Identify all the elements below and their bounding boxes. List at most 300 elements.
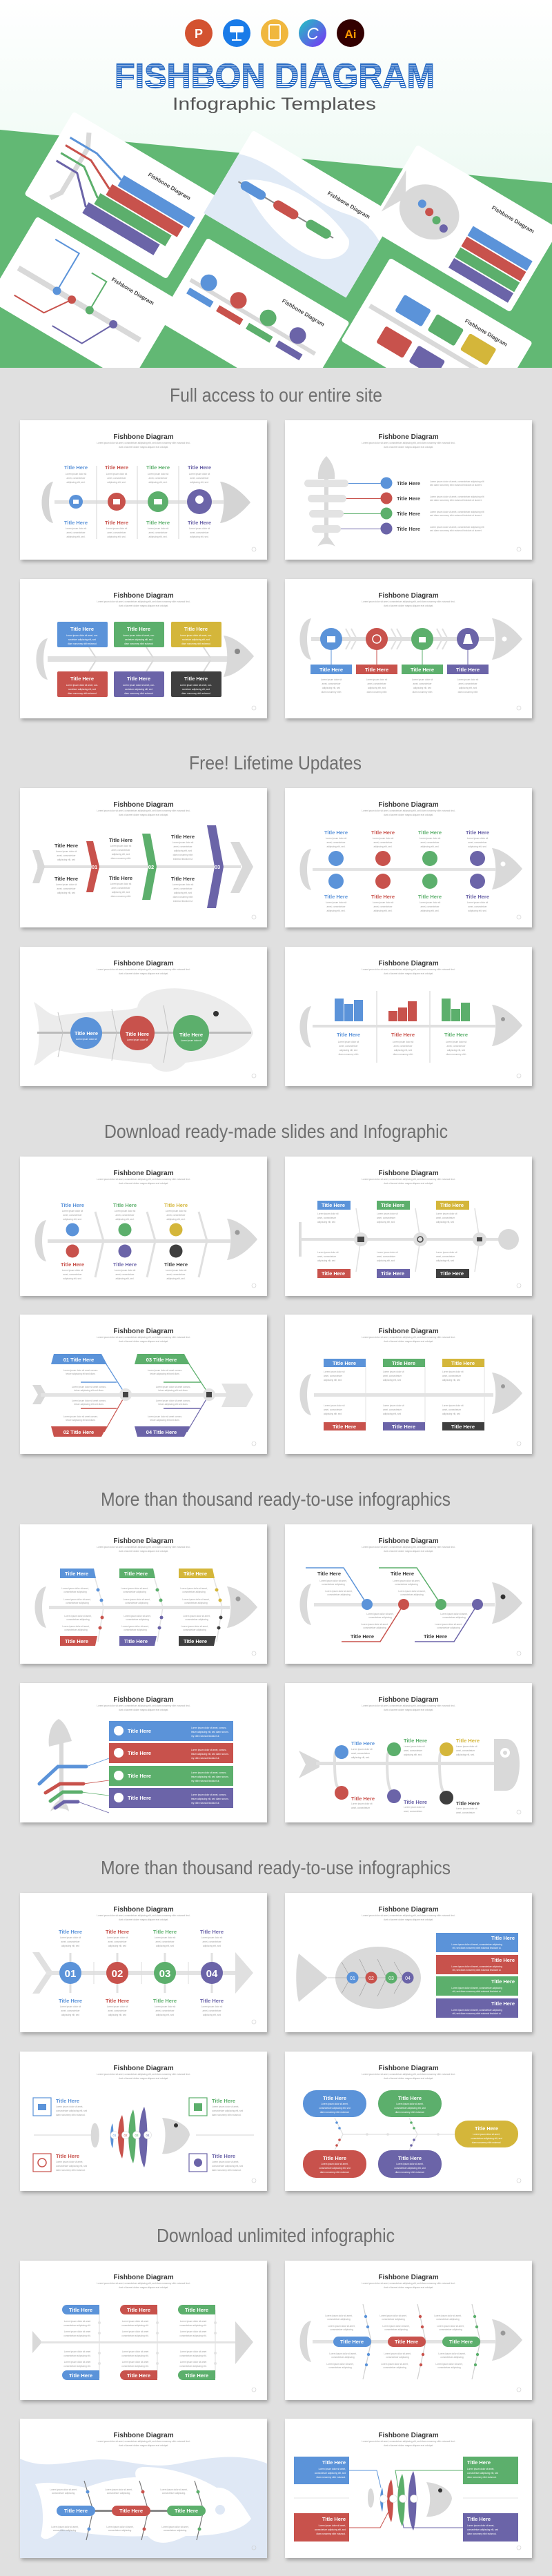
slide 11: tetuer adipiscing elit sed diam. [75,1403,104,1406]
slide 13: consectetuer adipiscing [126,1618,149,1621]
slide 6: Lorem ipsum dolor sit [467,901,488,904]
slide 8: amet, consectetuer [339,1045,358,1048]
slide 21: Lorem ipsum dolor sit amet [64,2350,90,2353]
slide 2: Lorem ipsum dolor sit amet, consectetuer adipiscing elit [430,495,484,498]
slide 19 [20,2052,267,2191]
slide 6 [285,788,532,927]
rotated slide A: Fishbone Diagram [147,171,192,201]
slide 8: Title Here [391,1032,415,1038]
slide 6: Lorem ipsum dolor sit [373,901,393,904]
app icons: Ai [345,28,356,41]
slide 17: adipiscing elit, sed [203,2014,221,2016]
slide 16: Title Here [351,1796,375,1802]
slide 4: amet, consectetuer [322,682,341,685]
slide 1: adipiscing elit, sed. [149,481,168,484]
slide 9: Title Here [113,1202,137,1208]
slide 24: consectetuer adipiscing elit, sed [315,2528,346,2531]
slide 16: adipiscing elit, sed. [456,1753,475,1756]
slide 6: Lorem ipsum dolor sit [326,837,346,840]
slide 17: amet, consectetuer [108,1940,127,1943]
slide 12: Lorem ipsum dolor sit amet, consectetuer adipiscing elit, sed diam nonummy nibh euismod tinci- [362,1336,455,1339]
slide 12: adipiscing elit, sed [324,1379,342,1382]
slide 15: Lorem ipsum dolor sit amet, consectetuer adipiscing elit, sed diam nonummy nibh euismod tinci- [97,1704,190,1707]
slide 21: Lorem ipsum dolor sit amet [64,2361,90,2363]
slide 17: dunt ut laoreet dolore magna aliquam erat volutpat. [119,1918,168,1921]
slide 4 [285,579,532,718]
slide 10: adipiscing elit, sed [436,1221,454,1223]
slide 19: Title Here [56,2098,79,2104]
slide 14: consectetuer adipiscing [442,1616,466,1619]
slide 9: Lorem ipsum dolor sit [62,1210,83,1212]
slide 23: Lorem ipsum dolor sit amet, [160,2488,188,2491]
slide 2: Lorem ipsum dolor sit amet, consectetuer adipiscing elit, sed diam nonummy nibh euismod tinci- [362,442,455,444]
slide 5: Title Here [171,876,195,882]
slide 5: Lorem ipsum dolor sit [172,841,193,844]
slide 12: Lorem ipsum dolor sit [383,1370,404,1373]
slide 14: Lorem ipsum dolor sit amet, consectetuer adipiscing elit, sed diam nonummy nibh euismod tinci- [362,1546,455,1548]
slide 21: consectetuer adipiscing elit. [121,2324,149,2327]
slide 14: Lorem ipsum dolor sit amet, [366,1613,394,1615]
slide 1: adipiscing elit, sed. [149,535,168,538]
slide 5: Title Here [109,837,132,843]
slide 24: Title Here [322,2459,346,2466]
rotated slide D: Fishbone Diagram [110,276,155,306]
slide 24: Title Here [322,2516,346,2522]
slide 19: consectetuer adipiscing elit, sed [212,2165,243,2167]
slide 13: Title Here [184,1638,207,1644]
slide 6: adipiscing elit, sed. [374,910,393,912]
slide 19: diam nonummy nibh euismod. [212,2114,241,2116]
slide 3: diam nonummy nibh euismod [68,692,97,695]
slide 5: Title Here [171,834,195,840]
slide 18: Lorem ipsum dolor sit amet, consectetuer adipiscing [451,1965,502,1968]
slide 8: diam nonummy nibh [339,1053,359,1056]
slide 13: consectetuer adipiscing [125,1602,148,1604]
slide 18: Title Here [491,1957,515,1963]
slide 1: Title Here [64,464,88,471]
slide 17: Title Here [59,1929,82,1935]
slide 9: adipiscing elit, sed. [167,1218,186,1221]
slide 2: Title Here [397,495,420,502]
slide 24: consectetuer adipiscing elit, sed [315,2472,346,2475]
slide 17: adipiscing elit, sed [108,1945,126,1947]
slide 23: Title Here [175,2508,198,2514]
slide 19: dunt ut laoreet dolore magna aliquam erat volutpat. [119,2077,168,2080]
slide 1: Lorem ipsum dolor sit [106,473,127,475]
slide 17: Lorem ipsum dolor sit [60,1936,81,1939]
slide 9: amet, consectetuer [63,1214,82,1217]
slide 22: Lorem ipsum dolor sit amet, [438,2352,466,2355]
slide 6: adipiscing elit, sed. [327,910,346,912]
slide 15: Title Here [128,1795,151,1801]
slide 1: amet, consectetuer [148,477,168,480]
slide 12: Title Here [392,1424,415,1430]
slide 22: Lorem ipsum dolor sit amet, [384,2352,411,2355]
slide 1: amet, consectetuer [190,477,209,480]
slide 15: tetuer adipiscing elit, sed diam nonum- [191,1731,229,1733]
slide 5: Title Here [109,875,132,881]
slide 1: Title Here [105,520,128,526]
slide 9: amet, consectetuer [166,1273,186,1276]
slide 17: Lorem ipsum dolor sit amet, consectetuer adipiscing elit, sed diam nonummy nibh euismod tinci- [97,1914,190,1917]
app icons: P [195,27,203,41]
slide 24: Fishbone Diagram [378,2432,439,2439]
slide 22: Lorem ipsum dolor sit amet, [326,2363,354,2366]
slide 13: consectetuer adipiscing [63,1591,87,1593]
slide 4: amet, consectetuer [367,682,386,685]
slide 19: consectetuer adipiscing elit, sed [212,2110,243,2112]
slide 3: Lorem ipsum dolor sit amet, con- [123,684,155,687]
slide 3: sectetuer adipiscing elit, sed [68,638,96,641]
slide 21: consectetuer adipiscing elit. [121,2365,149,2368]
slide 11: Lorem ipsum dolor sit amet consec- [72,1399,106,1402]
slide 5: dunt ut laoreet dolore magna aliquam erat volutpat. [119,814,168,816]
slide 12: amet, consectetuer [383,1408,402,1411]
slide 9: adipiscing elit, sed. [116,1218,135,1221]
slide 3: sectetuer adipiscing elit, sed [182,638,210,641]
slide 8 [285,947,532,1086]
slide 16: adipiscing elit, sed. [404,1753,422,1756]
slide 12: amet, consectetuer [324,1375,343,1377]
slide 16: amet, consectetuer [404,1749,423,1752]
slide 2: Lorem ipsum dolor sit amet, consectetuer adipiscing elit [430,511,484,513]
slide 15: Title Here [128,1773,151,1779]
slide 24: diam nonummy nibh euismod. [316,2476,346,2479]
slide 16: Title Here [456,1738,480,1744]
slide 8: Lorem ipsum dolor sit [446,1041,466,1043]
slide 14: Lorem ipsum dolor sit amet, [325,1590,353,1593]
rotated slide E: Fishbone Diagram [281,297,326,328]
slide 3: sectetuer adipiscing elit, sed [125,688,152,691]
slide 13: Title Here [184,1571,207,1577]
slide 16: Lorem ipsum dolor sit [404,1806,425,1809]
slide 17: Title Here [200,1929,224,1935]
slide 2: Fishbone Diagram [378,433,439,441]
slide 20: Lorem ipsum dolor sit amet, [473,2133,500,2136]
slide 3: diam nonummy nibh euismod [124,642,153,645]
slide 1: amet, consectetuer [107,477,126,480]
slide 22: Lorem ipsum dolor sit amet, [435,2363,463,2366]
slide 3: Title Here [184,676,208,682]
slide 5: diam nonummy nibh [111,895,131,898]
slide 14: Title Here [424,1633,447,1640]
slide 8: amet, consectetuer [393,1045,413,1048]
slide 10: Lorem ipsum dolor sit [377,1212,398,1215]
slide 10: amet, consectetuer [317,1255,337,1258]
heading: full access: Full access to our entire site [170,384,382,406]
slide 21: Lorem ipsum dolor sit amet [180,2350,206,2353]
slide 21: Lorem ipsum dolor sit amet [122,2350,148,2353]
slide 6: adipiscing elit, sed. [374,845,393,848]
slide 8: dunt ut laoreet dolore magna aliquam erat volutpat. [384,972,433,975]
slide 4: amet, consectetuer [458,682,477,685]
slide 13: Lorem ipsum dolor sit amet, [61,1587,89,1590]
heading: download unlimited: Download unlimited infographic [157,2225,395,2246]
slide 10: amet, consectetuer [436,1217,455,1219]
slide 22: consectetuer adipiscing [439,2328,462,2331]
slide 9: Lorem ipsum dolor sit [115,1269,135,1272]
slide 19: diam nonummy nibh euismod. [56,2169,86,2172]
slide 1: Lorem ipsum dolor sit [148,527,168,530]
slide 10: Title Here [440,1270,464,1277]
header banner [0,0,552,368]
slide 3: Lorem ipsum dolor sit amet, con- [180,634,212,637]
slide 1: adipiscing elit, sed. [67,535,86,538]
slide 11: dunt ut laoreet dolore magna aliquam erat volutpat. [119,1340,168,1343]
slide 5: diam nonummy nibh [111,857,131,860]
slide 18: dunt ut laoreet dolore magna aliquam erat volutpat. [384,1918,433,1921]
slide 13: Lorem ipsum dolor sit amet, [121,1625,149,1628]
slide 19: diam nonummy nibh euismod. [56,2114,86,2116]
slide 16: Lorem ipsum dolor sit [456,1745,477,1748]
slide 4: Title Here [411,667,434,673]
slide 13: Lorem ipsum dolor sit amet, [123,1598,150,1601]
slide 13: consectetuer adipiscing [124,1629,147,1631]
slide 23: consectetuer adipiscing. [164,2529,187,2532]
slide 23: Lorem ipsum dolor sit amet, [50,2488,77,2491]
slide 22: consectetuer adipiscing [328,2366,352,2369]
slide 22: Title Here [340,2339,364,2345]
slide 17: adipiscing elit, sed [61,2014,79,2016]
slide 10: Title Here [381,1270,404,1277]
slide 1: dunt ut laoreet dolore magna aliquam erat volutpat. [119,446,168,449]
slide 13: Title Here [124,1571,148,1577]
slide 22: consectetuer adipiscing [384,2328,408,2331]
slide 11: 01 Title Here [63,1357,94,1363]
slide 7: Lorem ipsum dolor sit amet, consectetuer adipiscing elit, sed diam nonummy nibh euismod tinci- [97,968,190,971]
slide 19: 04 [146,2134,150,2137]
slide 6: amet, consectetuer [468,905,487,908]
app icons [185,19,364,47]
slide 8: amet, consectetuer [446,1045,466,1048]
slide 7: dunt ut laoreet dolore magna aliquam erat volutpat. [119,972,168,975]
slide 9: amet, consectetuer [166,1214,186,1217]
slide 21 [20,2261,267,2400]
slide 21: Lorem ipsum dolor sit amet [122,2361,148,2363]
slide 23: Title Here [119,2508,143,2514]
slide 24: Lorem ipsum dolor sit amet, [467,2524,494,2527]
slide 5: adipiscing elit, sed [57,892,75,894]
slide 11: Lorem ipsum dolor sit amet consec- [72,1386,106,1388]
slide 10: Lorem ipsum dolor sit amet, consectetuer adipiscing elit, sed diam nonummy nibh euismod tinci- [362,1178,455,1181]
slide 7: Lorem ipsum dolor sit [127,1039,148,1041]
slide 14: Lorem ipsum dolor sit amet, [361,1623,388,1626]
heading: lifetime updates: Free! Lifetime Updates [189,752,362,774]
slide 9: Fishbone Diagram [113,1170,174,1177]
slide 17: adipiscing elit, sed [203,1945,221,1947]
slide 19: Lorem ipsum dolor sit amet, [56,2105,83,2108]
slide 17: Lorem ipsum dolor sit [201,2005,222,2008]
slide 3: diam nonummy nibh euismod [181,642,210,645]
slide 22: consectetuer adipiscing [436,2318,460,2321]
slide 23: Lorem ipsum dolor sit amet, consectetuer adipiscing elit, sed diam nonummy nibh euismod tinci- [97,2440,190,2443]
slide 5: adipiscing elit, sed [57,858,75,861]
slide 22: Lorem ipsum dolor sit amet, [329,2352,357,2355]
slide 5: diam nonummy nibh [173,854,193,856]
slide 17: amet, consectetuer [202,2009,221,2012]
slide 12: Title Here [333,1424,356,1430]
slide 21: consectetuer adipiscing elit. [179,2354,207,2357]
rotated slide B: Fishbone Diagram [326,190,371,220]
slide 18: 02 [368,1976,374,1981]
slide 23: dunt ut laoreet dolore magna aliquam erat volutpat. [119,2444,168,2447]
slide 13: consectetuer adipiscing [184,1602,208,1604]
heading: download ready-made: Download ready-made slides and Infographic [104,1121,448,1142]
slide 19: 01 [112,2134,117,2137]
slide 5: amet, consectetuer [57,887,76,890]
slide 15: Title Here [128,1750,151,1756]
slide 4: Lorem ipsum dolor sit [457,678,478,681]
slide 16: Title Here [404,1799,427,1805]
slide 9: adipiscing elit, sed. [63,1218,82,1221]
slide 6: amet, consectetuer [420,905,440,908]
slide 6: Title Here [418,894,442,900]
slide 10: adipiscing elit, sed [317,1221,335,1223]
slide 6: adipiscing elit, sed. [421,845,440,848]
slide 11: 03 Title Here [146,1357,177,1363]
slide 2: sed diam nonummy nibh euismod tincidunt ut laoreet. [430,514,482,517]
slide 18: Title Here [491,1978,515,1985]
slide 21: consectetuer adipiscing elit. [63,2365,91,2368]
slide 24: Title Here [467,2459,491,2466]
slide 1: amet, consectetuer [66,531,86,534]
slide 16: Lorem ipsum dolor sit [456,1807,477,1810]
slide 1: Lorem ipsum dolor sit amet, consectetuer adipiscing elit, sed diam nonummy nibh euismod tinci- [97,442,190,444]
slide 11: tetuer adipiscing elit sed diam. [159,1403,188,1406]
slide 22: consectetuer adipiscing [331,2356,355,2359]
slide 19: Title Here [212,2153,235,2159]
slide 9: Lorem ipsum dolor sit [166,1210,186,1212]
slide 15: tetuer adipiscing elit, sed diam nonum- [191,1798,229,1800]
slide 18: elit, sed diam nonummy nibh euismod tincidunt ut. [453,1990,501,1993]
slide 10: Title Here [381,1202,404,1208]
slide 6: amet, consectetuer [373,905,393,908]
slide 11: tetuer adipiscing elit sed diam. [75,1389,104,1392]
slide 23: consectetuer adipiscing. [162,2492,186,2495]
slide 3: dunt ut laoreet dolore magna aliquam erat volutpat. [119,604,168,607]
slide 2: sed diam nonummy nibh euismod tincidunt ut laoreet. [430,529,482,532]
slide 1 [20,420,267,560]
slide 1: Lorem ipsum dolor sit [189,527,210,530]
slide 22 [285,2261,532,2400]
slide 13: Fishbone Diagram [113,1537,174,1545]
slide 6: Fishbone Diagram [378,801,439,809]
slide 14: Lorem ipsum dolor sit amet, [319,1580,347,1582]
slide 17: adipiscing elit, sed [61,1945,79,1947]
slide 4: adipiscing elit, sed [459,687,477,689]
slide 3 [20,579,267,718]
slide 11: Lorem ipsum dolor sit amet consec- [148,1415,182,1418]
slide 24: dunt ut laoreet dolore magna aliquam erat volutpat. [384,2444,433,2447]
slide 11: Fishbone Diagram [113,1328,174,1335]
slide 19: Title Here [212,2098,235,2104]
slide 24: consectetuer adipiscing elit, sed [467,2528,498,2531]
slide 13: consectetuer adipiscing [183,1629,206,1631]
slide 5: adipiscing elit, sed [174,849,192,852]
slide 16: amet, consectetuer [456,1749,475,1752]
app icons: C [306,25,319,43]
slide 9: Title Here [164,1261,188,1268]
slide 22: Lorem ipsum dolor sit amet, [437,2325,464,2328]
slide 10 [285,1157,532,1296]
slide 2: Lorem ipsum dolor sit amet, consectetuer adipiscing elit [430,480,484,483]
slide 17: Lorem ipsum dolor sit [107,1936,128,1939]
slide 23: Lorem ipsum dolor sit amet, [105,2488,132,2491]
slide 4: diam nonummy nibh [458,691,478,694]
slide 1: Title Here [64,520,88,526]
slide 3: Lorem ipsum dolor sit amet, con- [123,634,155,637]
slide 6: amet, consectetuer [326,905,346,908]
slide 13: Lorem ipsum dolor sit amet, [63,1598,91,1601]
slide 1: Title Here [146,520,170,526]
slide 6: Title Here [324,894,348,900]
slide 19: 03 [135,2134,139,2137]
slide 20: consectetuer adipiscing elit, sed [394,2167,426,2170]
slide 14: Title Here [391,1571,414,1577]
slide 13: consectetuer adipiscing [123,1591,146,1593]
slide 12 [285,1315,532,1454]
slide 1: amet, consectetuer [148,531,168,534]
slide 4: Lorem ipsum dolor sit [366,678,387,681]
slide 17: amet, consectetuer [61,2009,80,2012]
slide 6: Lorem ipsum dolor sit [326,901,346,904]
slide 3: Title Here [184,626,208,632]
slide 12: adipiscing elit, sed [442,1379,460,1382]
slide 11: tetuer adipiscing elit sed diam. [66,1373,96,1375]
slide 17: Lorem ipsum dolor sit [60,2005,81,2008]
slide 21: Title Here [69,2307,92,2313]
slide 5 [20,788,267,927]
slide 8: adipiscing elit, sed [447,1049,465,1052]
slide 20: diam nonummy nibh euismod. [320,2171,349,2174]
slide 20: diam nonummy nibh euismod. [320,2111,349,2114]
slide 15: Lorem ipsum dolor sit amet, consec- [191,1749,226,1751]
slide 9: adipiscing elit, sed. [116,1277,135,1280]
slide 20: Lorem ipsum dolor sit amet, [396,2103,424,2105]
slide 6: amet, consectetuer [420,841,440,844]
slide 2: sed diam nonummy nibh euismod tincidunt ut laoreet. [430,484,482,486]
slide 17: amet, consectetuer [202,1940,221,1943]
slide 23: consectetuer adipiscing. [52,2492,75,2495]
slide 12: Title Here [392,1360,415,1366]
slide 21: Fishbone Diagram [113,2274,174,2281]
slide 19: Lorem ipsum dolor sit amet, consectetuer adipiscing elit, sed diam nonummy nibh euismod tinci- [97,2073,190,2076]
slide 22: Lorem ipsum dolor sit amet, [325,2314,353,2317]
slide 21: consectetuer adipiscing elit. [121,2334,149,2337]
slide 10: amet, consectetuer [377,1255,396,1258]
slide 18: elit, sed diam nonummy nibh euismod tincidunt ut. [453,2012,501,2015]
heading: more than thousand 2: More than thousand ready-to-use infographics [101,1857,451,1878]
slide 11: Lorem ipsum dolor sit amet, consectetuer adipiscing elit, sed diam nonummy nibh euismod tinci- [97,1336,190,1339]
slide 1: Lorem ipsum dolor sit [148,473,168,475]
slide 23: Lorem ipsum dolor sit amet, [106,2526,134,2528]
slide 17: Title Here [106,1998,129,2004]
slide 4: amet, consectetuer [413,682,432,685]
slide 12: Lorem ipsum dolor sit [324,1404,345,1407]
slide 12: adipiscing elit, sed [383,1413,401,1415]
slide 17: amet, consectetuer [155,1940,175,1943]
slide 6: Title Here [418,829,442,836]
slide 1: adipiscing elit, sed. [108,481,126,484]
slide 5: amet, consectetuer [57,854,76,857]
slide 19: consectetuer adipiscing elit, sed [56,2165,87,2167]
subtitle: Infographic Templates [172,95,376,114]
slide 2: dunt ut laoreet dolore magna aliquam erat volutpat. [384,446,433,449]
slide 12: adipiscing elit, sed [383,1379,401,1382]
slide 10: adipiscing elit, sed [377,1221,395,1223]
slide 19: Lorem ipsum dolor sit amet, [212,2105,239,2108]
slide 24: consectetuer adipiscing elit, sed [467,2472,498,2475]
